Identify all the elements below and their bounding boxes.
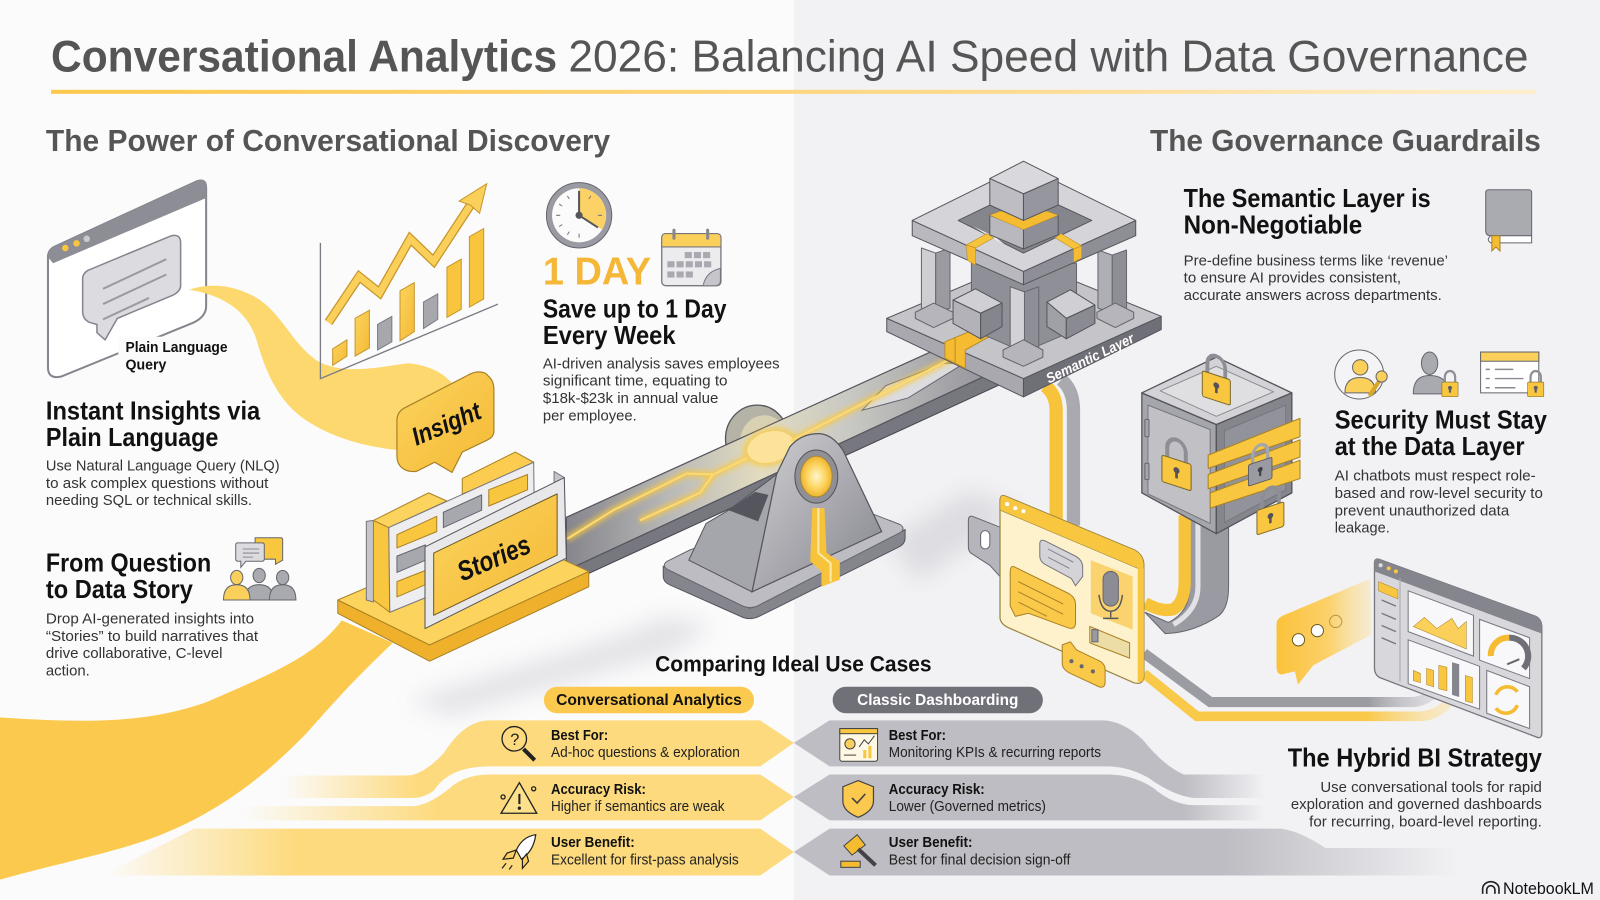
title: 2026: Balancing AI Speed with Data Governance: [568, 30, 1529, 81]
label: plain language query: [126, 340, 228, 373]
text block: question to data story: [46, 549, 258, 680]
text block: security: based and row-level security to: [1335, 486, 1543, 502]
heading: right section: The Governance Guardrails: [1150, 124, 1541, 158]
row text: conversational analytics: [551, 728, 740, 868]
pill: conversational analytics: Conversational Analytics: [556, 692, 742, 709]
text block: security: leakage.: [1335, 521, 1390, 537]
text block: security: prevent unauthorized data: [1335, 503, 1510, 519]
label: semantic layer: Semantic Layer: [1044, 330, 1138, 387]
conduit: chat to dashboard: [1144, 653, 1449, 716]
comparison rows: classic dashboarding: [794, 720, 1469, 876]
label: insight: Insight: [408, 397, 487, 451]
icon: people with chat bubbles: [223, 538, 296, 600]
seesaw beam with circuit lines: [566, 346, 1002, 584]
row text: classic dashboarding: Best for final decision sign-off: [889, 852, 1071, 868]
text block: instant insights: [46, 397, 280, 509]
text block: instant insights: Use Natural Language Query (NLQ): [46, 458, 280, 474]
text block: hybrid BI: Use conversational tools for rapid: [1320, 780, 1542, 796]
text block: save up to 1 day: Every Week: [543, 322, 676, 350]
row text: conversational analytics: Excellent for first-pass analysis: [551, 852, 739, 868]
text block: question to data story: From Question: [46, 549, 211, 577]
conduit: semantic layer to chat: [1045, 380, 1073, 526]
text block: semantic layer: Pre-define business terms like ‘revenue’: [1184, 253, 1448, 269]
text block: semantic layer: accurate answers across departments.: [1184, 288, 1442, 304]
chat window: [1000, 495, 1144, 687]
background: left half: [0, 0, 795, 900]
row text: classic dashboarding: Monitoring KPIs & recurring reports: [889, 745, 1101, 761]
gold ribbon: query to insight: [189, 286, 454, 451]
pill: conversational analytics: [544, 687, 754, 713]
row text: conversational analytics: Best For:: [551, 728, 608, 744]
dashboard mockup: [1374, 559, 1542, 738]
seesaw rear bearing: [726, 405, 789, 472]
seesaw fulcrum: [663, 434, 905, 619]
text block: question to data story: to Data Story: [46, 576, 194, 604]
text block: hybrid BI: exploration and governed dashboards: [1291, 797, 1542, 813]
icon: magnifier question: ?: [510, 731, 519, 749]
row text: classic dashboarding: Accuracy Risk:: [889, 782, 985, 798]
row text: conversational analytics: Ad-hoc questions & exploration: [551, 745, 740, 761]
label: stories: Stories: [452, 529, 535, 587]
title: [51, 30, 1529, 81]
text block: semantic layer: The Semantic Layer is: [1184, 185, 1431, 213]
row text: classic dashboarding: [889, 728, 1101, 868]
icon: shield: [843, 781, 873, 817]
text block: save up to 1 day: Save up to 1 Day: [543, 295, 727, 323]
row text: conversational analytics: User Benefit:: [551, 835, 635, 851]
text block: security: Security Must Stay: [1335, 407, 1548, 435]
text block: hybrid BI: [1288, 744, 1543, 831]
icon: gavel: [841, 835, 876, 867]
text block: save up to 1 day: AI-driven analysis saves employees: [543, 356, 780, 372]
icon: rocket: [502, 835, 536, 869]
text block: question to data story: “Stories” to build narratives that: [46, 629, 258, 645]
safe with locks: [1142, 352, 1300, 535]
text block: save up to 1 day: $18k-$23k in annual value: [543, 391, 718, 407]
gold speech bubble with dots: [1277, 579, 1371, 685]
row text: classic dashboarding: Best For:: [889, 728, 946, 744]
conduit: safe to chat: [1145, 510, 1229, 634]
stories stack: [338, 452, 589, 661]
text block: semantic layer: [1184, 185, 1448, 304]
row text: conversational analytics: Accuracy Risk:: [551, 782, 646, 798]
text block: security: AI chatbots must respect role-: [1335, 469, 1536, 485]
comparison heading: Comparing Ideal Use Cases: [655, 651, 932, 676]
semantic layer building: [887, 161, 1161, 397]
text block: semantic layer: Non-Negotiable: [1184, 212, 1362, 240]
label: plain language query: Plain Language: [126, 340, 228, 356]
insight bubble: [397, 372, 494, 472]
footer: NotebookLM logo: NotebookLM: [1503, 880, 1594, 898]
icon: calendar: [662, 229, 721, 286]
row text: classic dashboarding: User Benefit:: [889, 835, 972, 851]
text block: hybrid BI: The Hybrid BI Strategy: [1288, 744, 1543, 772]
icon: book: [1486, 190, 1532, 251]
text block: instant insights: to ask complex questions without: [46, 476, 268, 492]
icon: warning triangle: [501, 783, 537, 813]
title: Conversational Analytics: [51, 30, 557, 81]
icon: magnifier question: [502, 727, 535, 760]
text block: save up to 1 day: per employee.: [543, 408, 637, 424]
row text: classic dashboarding: Lower (Governed metrics): [889, 799, 1046, 815]
text block: security: at the Data Layer: [1335, 433, 1525, 461]
text block: instant insights: needing SQL or technical skills.: [46, 493, 252, 509]
text block: question to data story: action.: [46, 664, 90, 680]
text block: semantic layer: to ensure AI provides consistent,: [1184, 271, 1401, 287]
text block: save up to 1 day: [543, 295, 780, 424]
background: right half: [794, 0, 1600, 900]
text block: security: [1335, 407, 1548, 537]
text block: hybrid BI: for recurring, board-level reporting.: [1309, 815, 1542, 831]
text block: instant insights: Plain Language: [46, 424, 218, 452]
stat: 1 day: 1 DAY: [543, 251, 651, 294]
text block: question to data story: Drop AI-generated insights into: [46, 611, 254, 627]
gold swoosh: bottom left: [0, 620, 393, 880]
row text: conversational analytics: Higher if semantics are weak: [551, 799, 725, 815]
icon: clock: [546, 183, 612, 248]
text block: instant insights: Instant Insights via: [46, 397, 261, 425]
title rule: [51, 90, 1536, 94]
pill: classic dashboarding: [833, 687, 1043, 713]
bar chart with rising arrow: [320, 184, 498, 379]
pill: classic dashboarding: Classic Dashboarding: [857, 692, 1018, 709]
text block: question to data story: drive collaborative, C-level: [46, 646, 222, 662]
icon: dashboard: [840, 729, 878, 761]
icon: browser window with speech bubble: [48, 180, 233, 377]
icon: mic bubble: [968, 516, 1005, 577]
icons: security: [1335, 350, 1544, 399]
comparison rows: conversational analytics: [102, 720, 794, 876]
soft shadows: [408, 490, 1020, 716]
label: plain language query: Query: [126, 357, 167, 373]
heading: left section: The Power of Conversational Discovery: [46, 124, 610, 158]
text block: save up to 1 day: significant time, equating to: [543, 374, 728, 390]
